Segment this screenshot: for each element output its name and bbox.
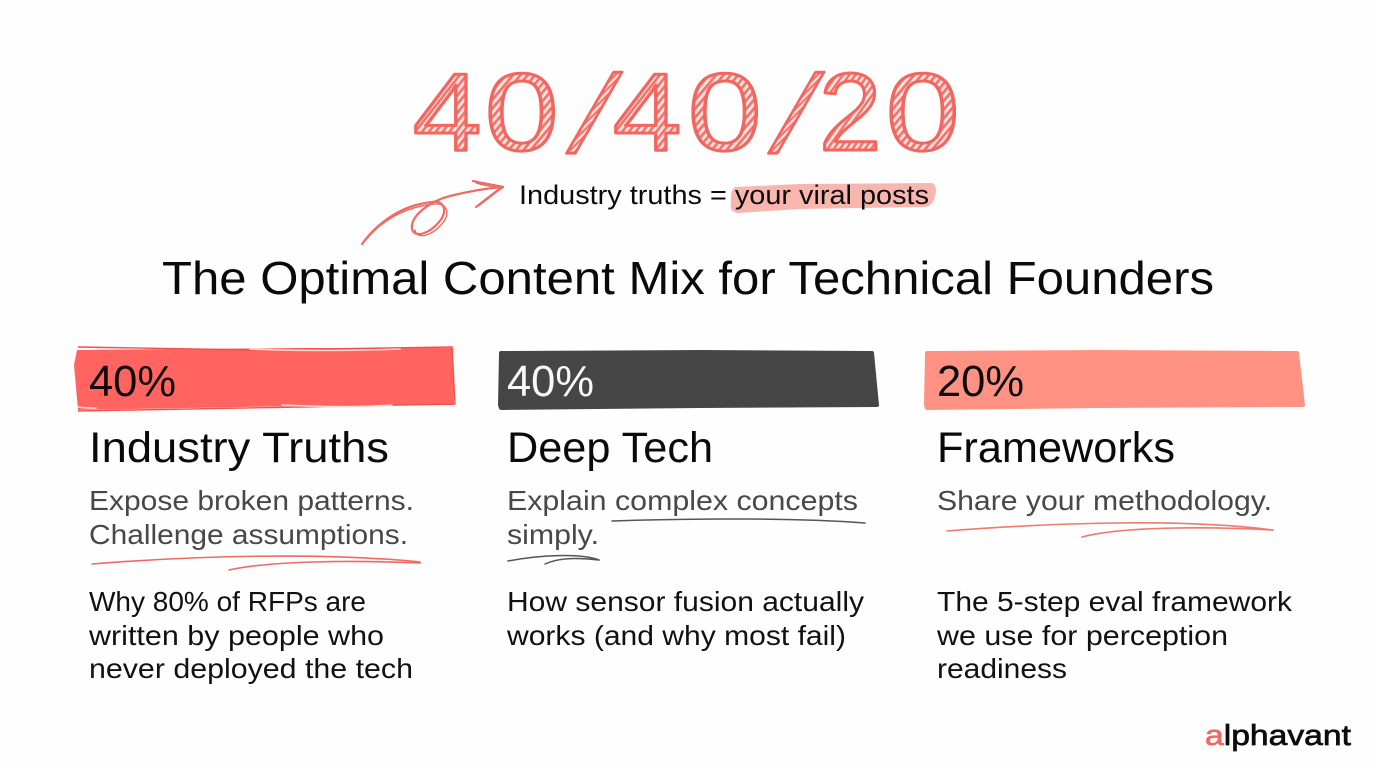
bar: 20% light coral: 20%: [937, 357, 1024, 406]
title: 40/40/20: 0: [886, 50, 959, 174]
title: 40/40/20: 4: [613, 50, 682, 174]
bar: 40% dark: [500, 352, 877, 408]
example text: we use for perception: [936, 620, 1228, 651]
title: 40/40/20: /: [762, 52, 831, 175]
heading: Industry Truths: Industry Truths: [89, 424, 389, 472]
example text: How sensor fusion actually: [507, 586, 864, 617]
title: 40/40/20: [413, 50, 959, 175]
example text: readiness: [937, 653, 1067, 684]
bar: 40% coral: 40%: [89, 357, 176, 406]
example text: The 5-step eval framework: [937, 586, 1293, 617]
underline: [92, 556, 420, 570]
bar: 40% dark: 40%: [507, 357, 594, 406]
example text: [88, 586, 413, 684]
title: 40/40/20: 4: [413, 50, 482, 174]
description: [89, 485, 414, 550]
example text: works (and why most fail): [506, 620, 846, 651]
description: simply.: [507, 519, 599, 550]
example text: Why 80% of RFPs are: [89, 586, 366, 617]
example text: never deployed the tech: [89, 653, 413, 684]
description: Share your methodology.: [937, 485, 1272, 516]
title: 40/40/20: 2: [819, 50, 881, 174]
title: 40/40/20: 0: [485, 50, 558, 174]
panel: Deep Tech: [500, 352, 877, 651]
bar: 20% light coral: [926, 352, 1303, 408]
description: Explain complex concepts: [507, 485, 858, 516]
highlight: your viral posts: [731, 183, 936, 213]
heading: Frameworks: Frameworks: [937, 424, 1175, 472]
example text: [936, 586, 1293, 684]
subtitle with highlighted phrase: Industry truths = your viral posts: [519, 180, 929, 210]
description: Challenge assumptions.: [89, 519, 408, 550]
logo: alphavant: alphavant: [1205, 720, 1351, 752]
description: Expose broken patterns.: [89, 485, 414, 516]
bar: 40% coral: [74, 347, 455, 411]
underline: [947, 523, 1273, 537]
panel: Frameworks: [926, 352, 1303, 684]
panel: Industry Truths: [74, 347, 455, 684]
icon: looping hand-drawn arrow: [362, 181, 503, 244]
description: [507, 485, 858, 550]
heading: The Optimal Content Mix for Technical Founders: The Optimal Content Mix for Technical Founders: [162, 252, 1214, 304]
underline: [508, 519, 865, 564]
title: 40/40/20: 0: [688, 50, 761, 174]
example text: [506, 586, 864, 651]
example text: written by people who: [88, 620, 384, 651]
title: 40/40/20: /: [560, 52, 629, 175]
heading: Deep Tech: Deep Tech: [507, 424, 713, 472]
